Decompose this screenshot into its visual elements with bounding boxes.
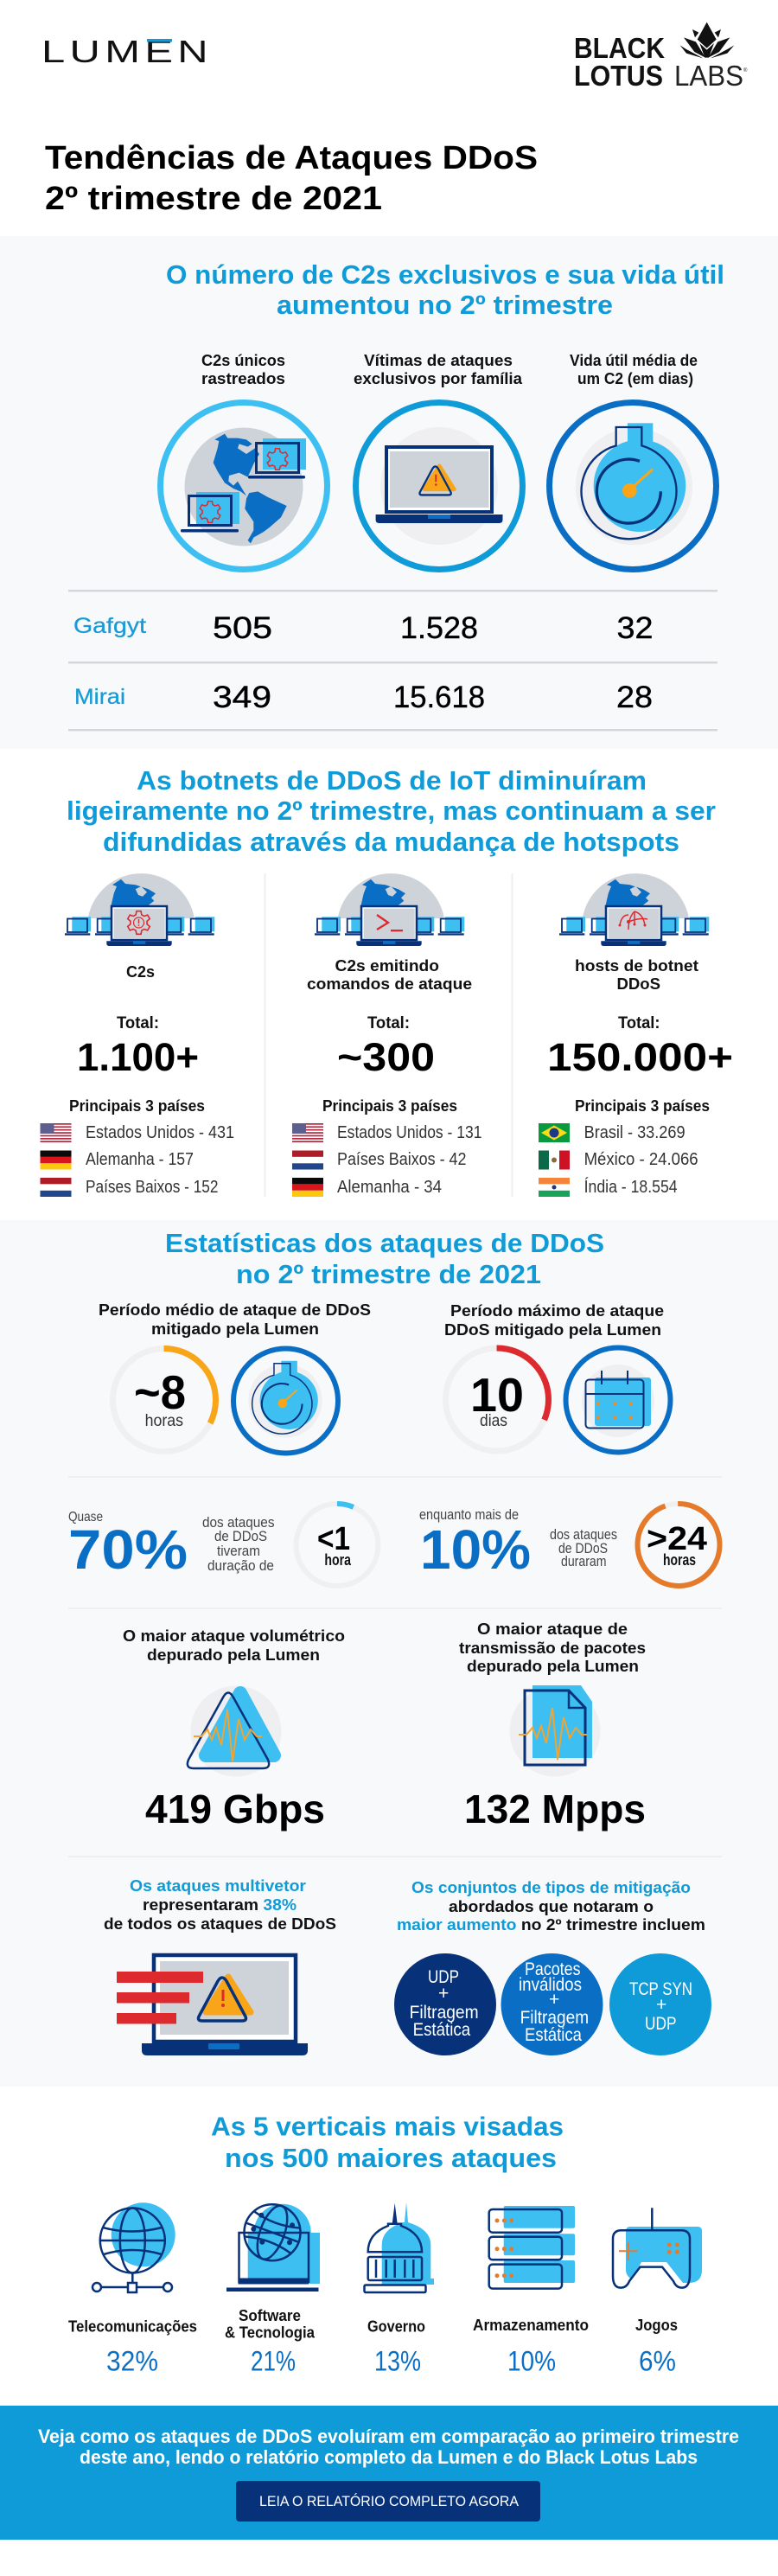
heading: C2s: O número de C2s exclusivos e sua vida útil bbox=[166, 259, 724, 290]
number: 150.000+ bbox=[547, 1035, 733, 1079]
stat: 10 percent: dos ataques bbox=[550, 1526, 617, 1543]
vertical: games: Jogos bbox=[635, 2317, 678, 2334]
stat: 70 percent: Quase bbox=[68, 1510, 103, 1525]
heading: verticals: As 5 verticais mais visadas bbox=[211, 2112, 564, 2141]
subheading: maximum: Período máximo de ataque bbox=[450, 1302, 664, 1320]
circle: UDP + static filtering: UDP bbox=[428, 1967, 459, 1987]
list: countries: Alemanha - 157 bbox=[86, 1150, 194, 1169]
subheading: maximum: DDoS mitigado pela Lumen bbox=[444, 1321, 661, 1339]
number: 1.100+ bbox=[77, 1035, 199, 1079]
logo: Lumen: LUMEN bbox=[41, 34, 213, 69]
icon: calendar bbox=[565, 1347, 671, 1453]
list: countries: Países Baixos - 42 bbox=[337, 1150, 467, 1169]
column header: vida útil bbox=[570, 352, 698, 387]
heading: botnets: difundidas através da mudança de hotspots bbox=[103, 827, 679, 857]
heading: C2s: aumentou no 2º trimestre bbox=[277, 290, 613, 320]
ring: 10 days: 10 bbox=[470, 1368, 524, 1422]
vertical: software: Software bbox=[239, 2307, 301, 2324]
text: mitigation sets bbox=[397, 1879, 705, 1934]
countries heading: Principais 3 países bbox=[69, 1097, 205, 1115]
block: largest volumetric attack: depurado pela Lumen bbox=[147, 1646, 320, 1664]
title: 2º trimestre de 2021 bbox=[45, 181, 382, 217]
heading: statistics: no 2º trimestre de 2021 bbox=[236, 1259, 541, 1289]
stat: 10 percent: duraram bbox=[561, 1553, 607, 1569]
ring: 8 hours bbox=[112, 1349, 216, 1451]
vertical: games bbox=[613, 2208, 702, 2377]
panel: botnet hosts column bbox=[539, 873, 733, 1197]
icon: network laptops bbox=[559, 873, 709, 946]
icon: stopwatch bbox=[550, 403, 716, 569]
icon: servers bbox=[489, 2206, 575, 2289]
stat: 70 percent: 70% bbox=[68, 1518, 188, 1581]
column header: vítimas bbox=[354, 352, 523, 387]
icon: globe with laptops bbox=[161, 403, 327, 569]
vertical: government: Governo bbox=[367, 2317, 425, 2335]
text: multivector attacks: Os ataques multivetor bbox=[130, 1877, 306, 1895]
row: Mirai bbox=[74, 681, 653, 714]
column header: C2s únicos bbox=[201, 352, 285, 387]
heading: C2s bbox=[166, 259, 724, 320]
icon: laptop under attack bbox=[117, 1955, 308, 2055]
heading: botnets bbox=[67, 765, 716, 857]
block: largest volumetric attack bbox=[123, 1627, 345, 1831]
label: C2s bbox=[126, 963, 155, 981]
list: countries bbox=[40, 1123, 234, 1197]
block: largest packet attack bbox=[459, 1620, 646, 1831]
stat: 10 percent: de DDoS bbox=[558, 1540, 608, 1556]
ring: under 1 hour: hora bbox=[324, 1551, 352, 1569]
number: ~300 bbox=[337, 1035, 435, 1079]
list: countries: Brasil - 33.269 bbox=[584, 1123, 686, 1142]
label: hosts de botnet bbox=[575, 957, 698, 975]
heading: verticals bbox=[211, 2112, 564, 2173]
ring: under 1 hour bbox=[296, 1504, 379, 1586]
column header: vida útil: um C2 (em dias) bbox=[577, 370, 693, 387]
circle: UDP + static filtering bbox=[394, 1953, 496, 2055]
logo: Black Lotus Labs bbox=[574, 22, 748, 92]
circle: UDP + static filtering: Filtragem bbox=[410, 2003, 479, 2023]
button: LEIA O RELATÓRIO COMPLETO AGORA bbox=[259, 2493, 520, 2509]
circle: invalid packets + static filtering bbox=[501, 1953, 603, 2055]
block: largest packet attack: O maior ataque de bbox=[477, 1620, 628, 1638]
label: C2s emitindo bbox=[335, 957, 439, 975]
vertical: storage: Armazenamento bbox=[473, 2317, 589, 2334]
subheading: average: mitigado pela Lumen bbox=[151, 1320, 319, 1338]
vertical: government: 13% bbox=[374, 2346, 421, 2377]
row: Gafgyt: 32 bbox=[617, 611, 654, 645]
panel: attack commands column bbox=[292, 873, 482, 1197]
list: countries bbox=[292, 1123, 482, 1197]
vertical: games: 6% bbox=[639, 2346, 676, 2377]
panel: C2s column bbox=[40, 873, 234, 1197]
logo: Black Lotus Labs: ® bbox=[743, 67, 748, 74]
icon: dome bbox=[365, 2202, 434, 2292]
circle: invalid packets + static filtering: Pacotes bbox=[525, 1959, 581, 1979]
row: Gafgyt bbox=[73, 611, 654, 645]
block: largest volumetric attack: O maior ataque volumétrico bbox=[123, 1627, 345, 1645]
subheading: maximum bbox=[444, 1302, 664, 1339]
column header: C2s únicos: C2s únicos bbox=[201, 352, 285, 369]
icon: stopwatch bbox=[233, 1349, 338, 1453]
text: multivector attacks: representaram 38% bbox=[143, 1896, 297, 1914]
row: Gafgyt: 505 bbox=[213, 611, 272, 645]
ring: 10 days: dias bbox=[480, 1412, 507, 1430]
banner: call to action bbox=[0, 2406, 778, 2540]
vertical: software bbox=[225, 2196, 320, 2377]
column dividers bbox=[265, 873, 513, 1197]
heading: statistics: Estatísticas dos ataques de DDoS bbox=[165, 1228, 604, 1258]
title bbox=[45, 140, 538, 217]
circle: UDP + static filtering: + bbox=[438, 1984, 449, 2004]
vertical: software: & Tecnologia bbox=[225, 2324, 316, 2342]
list: countries: Alemanha - 34 bbox=[337, 1178, 442, 1197]
stat: 10 percent bbox=[419, 1506, 617, 1581]
vertical: telecom: 32% bbox=[106, 2346, 158, 2377]
vertical: government bbox=[365, 2202, 434, 2377]
subheading: average: Período médio de ataque de DDoS bbox=[99, 1301, 371, 1319]
list: countries: Estados Unidos - 131 bbox=[337, 1123, 482, 1142]
icon: laptop with warning bbox=[356, 403, 522, 569]
circle: invalid packets + static filtering: Filtragem bbox=[520, 2008, 589, 2028]
label: DDoS bbox=[617, 975, 660, 993]
circle: TCP SYN + UDP: + bbox=[656, 1995, 666, 2015]
vertical: software: 21% bbox=[251, 2346, 296, 2377]
column header: vítimas: Vítimas de ataques bbox=[364, 352, 513, 369]
circle: invalid packets + static filtering: inválidos bbox=[519, 1975, 582, 1995]
circle: TCP SYN + UDP bbox=[609, 1953, 711, 2055]
text: multivector attacks: de todos os ataques de DDoS bbox=[104, 1915, 336, 1933]
vertical: storage bbox=[473, 2206, 589, 2377]
subheading: average bbox=[99, 1301, 371, 1338]
stat: 70 percent: duração de bbox=[207, 1557, 274, 1574]
text: multivector attacks bbox=[104, 1877, 336, 1933]
table bbox=[68, 590, 717, 732]
block: largest packet attack: depurado pela Lumen bbox=[467, 1658, 639, 1675]
column header: C2s únicos: rastreados bbox=[201, 370, 285, 387]
row: Mirai: 349 bbox=[213, 681, 271, 714]
logo: Black Lotus Labs: LOTUS bbox=[574, 60, 663, 92]
label bbox=[307, 957, 472, 993]
title: Tendências de Ataques DDoS bbox=[45, 140, 538, 176]
stat: 70 percent: de DDoS bbox=[214, 1528, 267, 1544]
stat: 70 percent: dos ataques bbox=[202, 1514, 275, 1531]
total: Total: bbox=[117, 1014, 159, 1032]
total: Total: bbox=[618, 1014, 660, 1032]
countries heading: Principais 3 países bbox=[322, 1097, 457, 1115]
icon: C2s laptops bbox=[65, 873, 214, 946]
label bbox=[575, 957, 698, 993]
row: Gafgyt: 1.528 bbox=[400, 611, 478, 645]
icon: globe network bbox=[92, 2202, 175, 2292]
list: countries bbox=[539, 1123, 698, 1197]
banner: call to action: deste ano, lendo o relatório completo da Lumen e do Black Lotus Labs bbox=[80, 2446, 698, 2468]
circle: invalid packets + static filtering: Estática bbox=[525, 2025, 582, 2045]
ring: over 24 hours: horas bbox=[663, 1551, 696, 1569]
list: countries: México - 24.066 bbox=[584, 1150, 698, 1169]
heading: botnets: ligeiramente no 2º trimestre, mas continuam a ser bbox=[67, 796, 716, 826]
block: largest packet attack: 132 Mpps bbox=[464, 1787, 646, 1831]
circle: UDP + static filtering: Estática bbox=[413, 2020, 470, 2040]
ring: over 24 hours bbox=[637, 1503, 720, 1587]
total: Total: bbox=[367, 1014, 410, 1032]
list: countries: Índia - 18.554 bbox=[584, 1177, 678, 1197]
icon: document pulse bbox=[510, 1685, 600, 1776]
ring: under 1 hour: <1 bbox=[317, 1521, 350, 1557]
vertical: telecom: Telecomunicações bbox=[68, 2317, 197, 2335]
block: largest packet attack: transmissão de pacotes bbox=[459, 1640, 646, 1657]
logo: Black Lotus Labs: LABS bbox=[674, 60, 743, 92]
column header: vítimas: exclusivos por família bbox=[354, 370, 523, 387]
ring: 8 hours: horas bbox=[145, 1412, 183, 1430]
column header: vida útil: Vida útil média de bbox=[570, 352, 698, 369]
list: countries: Países Baixos - 152 bbox=[86, 1178, 218, 1197]
vertical: telecom bbox=[68, 2202, 197, 2377]
row: Gafgyt: Gafgyt bbox=[73, 614, 146, 638]
label: comandos de ataque bbox=[307, 975, 472, 993]
logo: Black Lotus Labs: BLACK bbox=[574, 32, 665, 64]
text: mitigation sets: maior aumento no 2º trimestre incluem bbox=[397, 1916, 705, 1934]
icon: triangle pulse bbox=[188, 1686, 282, 1776]
button bbox=[236, 2481, 540, 2522]
ring: 10 days bbox=[446, 1348, 548, 1451]
countries heading: Principais 3 países bbox=[575, 1097, 710, 1115]
vertical: storage: 10% bbox=[507, 2346, 556, 2377]
row: Mirai: 28 bbox=[616, 681, 653, 714]
stat: 70 percent bbox=[68, 1510, 275, 1581]
heading: statistics bbox=[165, 1228, 604, 1289]
heading: botnets: As botnets de DDoS de IoT diminuíram bbox=[137, 765, 647, 796]
row: Mirai: Mirai bbox=[74, 685, 125, 709]
banner: call to action: Veja como os ataques de DDoS evoluíram em comparação ao primeiro trimestre bbox=[38, 2426, 739, 2447]
text: mitigation sets: abordados que notaram o bbox=[449, 1898, 654, 1915]
icon: terminal laptops bbox=[315, 873, 464, 946]
circle: TCP SYN + UDP: TCP SYN bbox=[629, 1979, 692, 1999]
list: countries: Estados Unidos - 431 bbox=[86, 1123, 234, 1142]
stat: 70 percent: tiveram bbox=[217, 1543, 260, 1559]
text: mitigation sets: Os conjuntos de tipos de mitigação bbox=[411, 1879, 691, 1896]
icon: laptop globe bbox=[226, 2196, 320, 2292]
block: largest volumetric attack: 419 Gbps bbox=[145, 1787, 325, 1831]
stat: 10 percent: enquanto mais de bbox=[419, 1506, 519, 1523]
stat: 10 percent: 10% bbox=[420, 1518, 531, 1581]
ring: over 24 hours: >24 bbox=[647, 1521, 707, 1557]
ring: 8 hours: ~8 bbox=[134, 1365, 186, 1419]
panel: attack statistics bbox=[0, 1220, 778, 2087]
circle: TCP SYN + UDP: UDP bbox=[645, 2014, 676, 2034]
heading: verticals: nos 500 maiores ataques bbox=[225, 2143, 557, 2173]
circle: invalid packets + static filtering: + bbox=[549, 1990, 559, 2010]
panel: C2s bbox=[0, 236, 778, 749]
row: Mirai: 15.618 bbox=[393, 681, 485, 714]
icon: game controller bbox=[613, 2208, 702, 2288]
